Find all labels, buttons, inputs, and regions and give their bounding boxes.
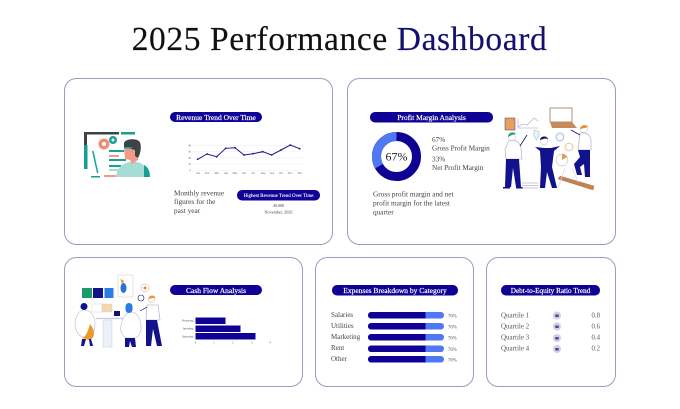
row: utilities: [331, 322, 457, 330]
heading pill: cash flow: Cash Flow Analysis: [186, 286, 246, 295]
bar chart: cash flow: 3: [251, 342, 253, 344]
line chart: monthly revenue: 0: [190, 170, 192, 172]
callout: highest revenue: 40,000: [273, 203, 284, 209]
row: quartile 3: [501, 334, 601, 342]
line chart: monthly revenue: Aug: [261, 172, 266, 175]
person left: [505, 140, 522, 159]
row: salaries: 76%: [448, 314, 457, 320]
title: 2025 Performance Dashboard: [132, 21, 547, 58]
panel: cash flow: [64, 258, 302, 386]
bar chart: cash flow: [182, 318, 271, 344]
row: other: 76%: [448, 358, 457, 364]
heading pill: profit margin: [370, 112, 493, 122]
text: monthly revenue description: figures for the: [174, 197, 215, 206]
person left: [75, 310, 95, 338]
row: quartile 3: Quartile 3: [501, 334, 530, 342]
row: salaries: [331, 311, 457, 320]
line chart: monthly revenue: Feb: [205, 172, 210, 175]
line chart: monthly revenue: [188, 144, 303, 175]
line chart: monthly revenue: May: [232, 172, 238, 175]
bar chart: cash flow: Financing: [182, 318, 194, 322]
panel: debt to equity: [486, 258, 616, 386]
panel: profit margin: [348, 78, 616, 244]
line chart: monthly revenue: Dec: [298, 172, 303, 175]
heading pill: debt to equity: Debt-to-Equity Ratio Trend: [511, 287, 591, 295]
line chart: monthly revenue: 40: [188, 144, 192, 148]
row: marketing: 76%: [448, 336, 457, 342]
callout: highest revenue: [237, 190, 320, 216]
donut chart: 67%: [376, 136, 416, 176]
line chart: monthly revenue: Jan: [196, 172, 200, 175]
row: rent: 76%: [448, 348, 457, 353]
row: marketing: [331, 333, 457, 342]
person centre: [535, 146, 560, 188]
row: quartile 1: [501, 312, 601, 320]
row: quartile 1: 0.8: [592, 312, 601, 320]
text: margin description: Gross profit margin and net: [373, 190, 454, 198]
line chart: monthly revenue: 30: [188, 150, 192, 154]
text: monthly revenue description: past year: [174, 206, 201, 215]
line chart: monthly revenue: Oct: [279, 172, 283, 175]
icon: analyst at computer: [84, 132, 150, 178]
heading pill: revenue trend: Revenue Trend Over Time: [176, 113, 257, 122]
bar chart: cash flow: 1: [213, 342, 215, 344]
bar chart: cash flow: 4: [269, 342, 271, 344]
heading pill: expenses: Expenses Breakdown by Category: [343, 286, 447, 295]
row: utilities: Utilities: [331, 322, 354, 330]
bar chart: cash flow: 0: [195, 342, 197, 344]
panel: expenses breakdown: [316, 258, 474, 386]
panel: revenue trend: [64, 78, 332, 244]
text: margin description: quarter: [373, 208, 394, 216]
row: quartile 2: 0.6: [592, 324, 601, 330]
person middle: [121, 312, 141, 338]
line chart: monthly revenue: Mar: [214, 172, 219, 175]
text: monthly revenue description: Monthly revenue: [174, 188, 224, 198]
row: quartile 3: 0.4: [592, 334, 601, 342]
row: other: Other: [331, 355, 348, 363]
heading pill: cash flow: [170, 285, 262, 295]
person right: [148, 296, 154, 302]
line chart: monthly revenue: Jun: [242, 172, 247, 175]
heading pill: profit margin: Profit Margin Analysis: [397, 113, 466, 122]
row: quartile 4: Quartile 4: [501, 344, 530, 352]
row: quartile 4: [501, 344, 601, 353]
line chart: monthly revenue: 20: [188, 157, 192, 160]
row: marketing: Marketing: [331, 333, 361, 341]
bar chart: cash flow: Operating: [182, 334, 194, 338]
bar chart: cash flow: 2: [232, 342, 234, 344]
legend: margins: 67%: [432, 136, 445, 144]
legend: margins: Net Profit Margin: [432, 164, 484, 172]
row: quartile 2: [501, 322, 601, 330]
row: rent: Rent: [331, 344, 344, 352]
row: utilities: 76%: [448, 326, 457, 330]
row: quartile 4: 0.2: [592, 346, 601, 352]
row: rent: [331, 344, 457, 353]
callout: highest revenue: Highest Revenue Trend Over Time: [244, 194, 314, 199]
illustration: three business people: [503, 108, 594, 190]
line chart: monthly revenue: 10: [188, 163, 192, 166]
bar chart: cash flow: Investing: [183, 326, 194, 330]
legend: margins: 33%: [432, 156, 445, 164]
donut chart: 67%: 67%: [386, 150, 408, 164]
row: quartile 2: Quartile 2: [501, 322, 530, 330]
legend: margins: Gross Profit Margin: [432, 144, 490, 152]
person right: [578, 133, 591, 150]
illustration: team at board: [75, 275, 162, 347]
row: salaries: Salaries: [331, 311, 353, 319]
line chart: monthly revenue: Jul: [251, 172, 255, 175]
callout: highest revenue: November, 2026: [265, 210, 292, 216]
line chart: monthly revenue: Nov: [288, 172, 293, 175]
row: quartile 1: Quartile 1: [501, 312, 530, 320]
text: margin description: profit margin for the latest: [373, 198, 450, 208]
line chart: monthly revenue: Apr: [224, 172, 228, 175]
row: other: [331, 355, 457, 364]
line chart: monthly revenue: Sep: [270, 172, 275, 175]
